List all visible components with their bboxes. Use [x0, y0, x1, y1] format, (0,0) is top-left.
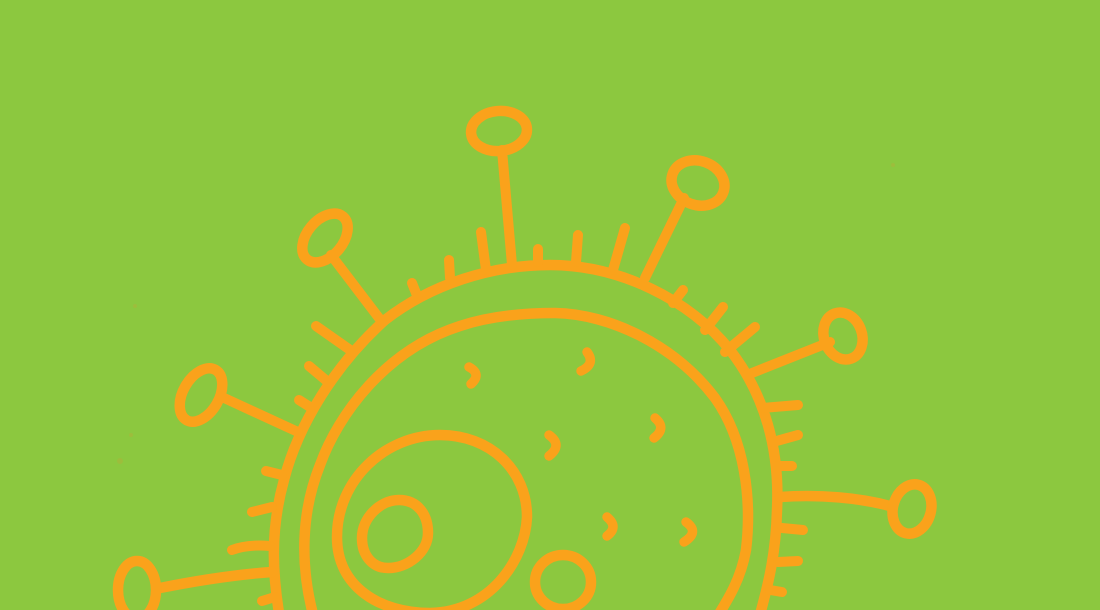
small hook marks [469, 352, 693, 542]
nucleus [337, 435, 527, 610]
left upper stalk spike [171, 361, 298, 432]
right stalk spike [780, 480, 937, 538]
outer membrane [274, 265, 777, 610]
virus [118, 109, 937, 610]
faint specks [117, 163, 895, 464]
organelle ring [535, 555, 591, 609]
short spikes [232, 228, 803, 601]
upper right stalk spike [645, 153, 731, 278]
inner membrane [304, 313, 748, 610]
right upper stalk spike [747, 307, 869, 375]
upper left stalk spike [293, 205, 382, 322]
top stalk spike [469, 109, 529, 265]
left lower stalk spike [118, 561, 272, 610]
nucleolus [362, 500, 428, 568]
